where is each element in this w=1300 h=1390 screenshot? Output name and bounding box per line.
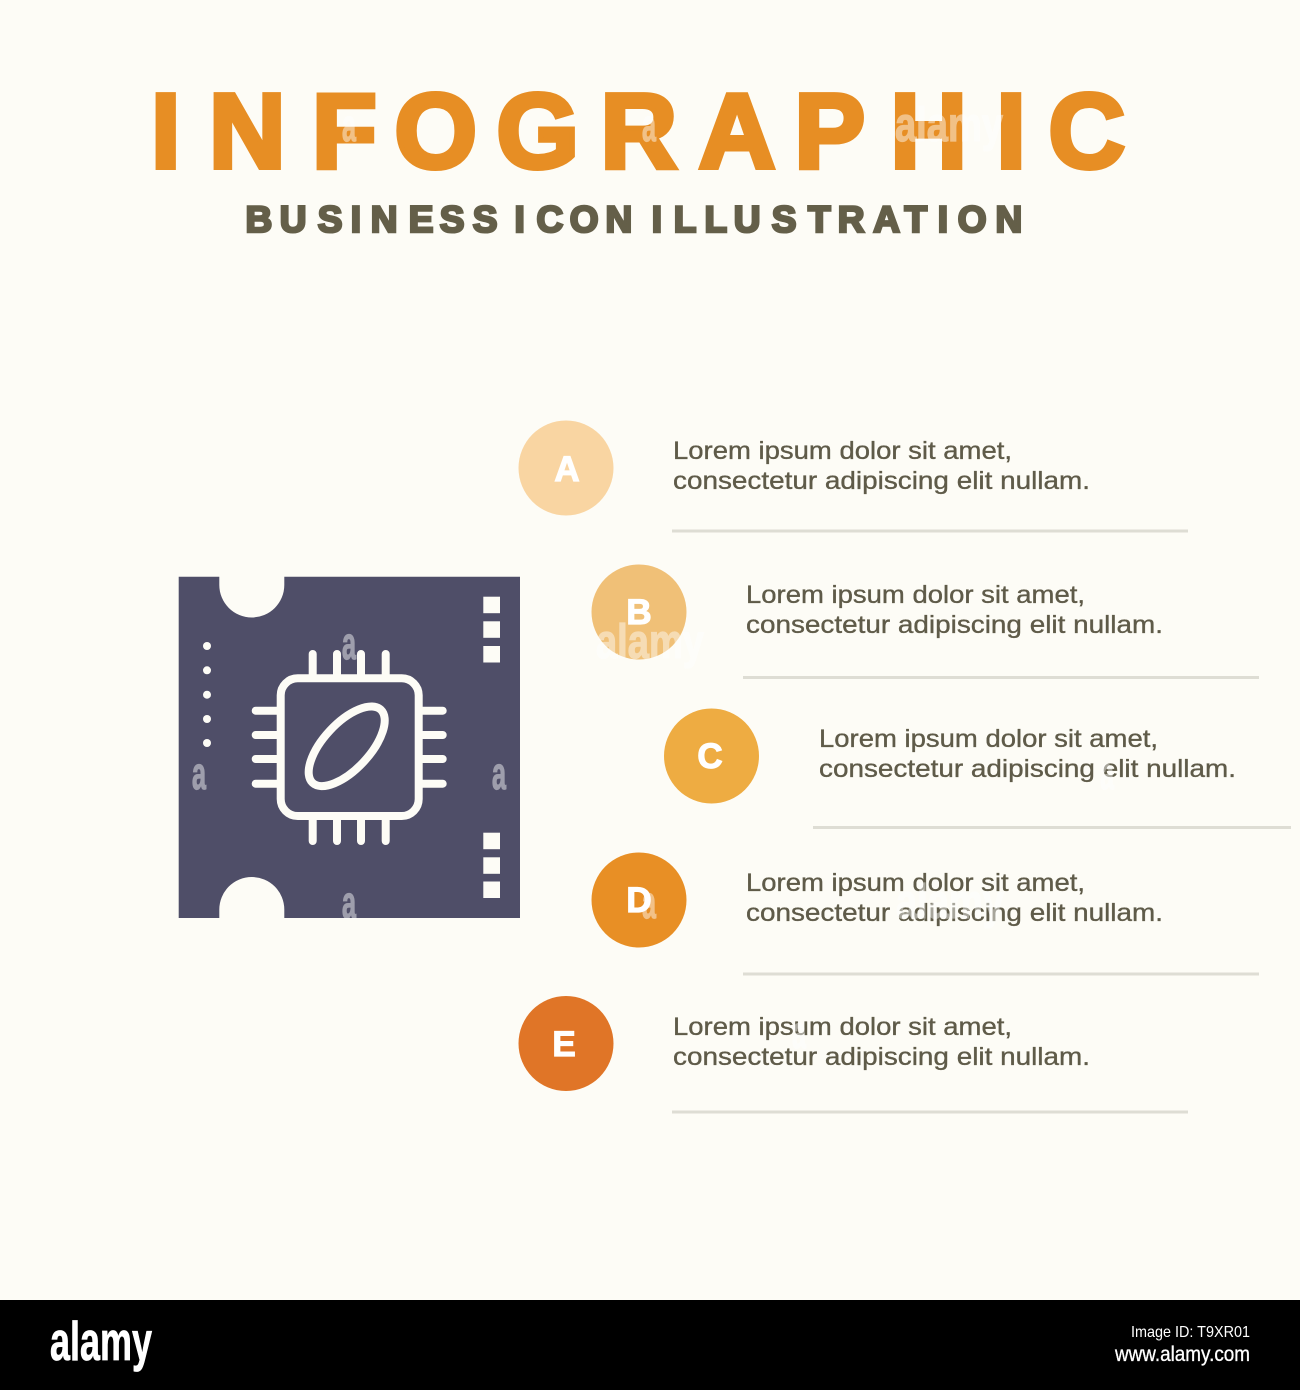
badge B — [592, 564, 686, 660]
watermarks: a — [342, 877, 357, 928]
watermarks: a — [342, 618, 357, 669]
step C — [664, 708, 1291, 829]
title: INFOGRAPHIC — [151, 72, 1125, 190]
chip body — [281, 678, 419, 816]
letter A: A — [554, 450, 580, 489]
board contact squares — [483, 597, 500, 898]
letter C: C — [697, 737, 723, 776]
step E — [518, 996, 1188, 1114]
watermarks: a — [1100, 748, 1115, 799]
badge D — [592, 852, 686, 948]
chip leaf ellipse — [296, 694, 398, 799]
watermarks: alamy — [596, 616, 704, 669]
divider A — [672, 530, 1188, 532]
letter E: E — [552, 1025, 576, 1064]
letter B: B — [626, 593, 652, 632]
divider B — [743, 676, 1259, 679]
watermarks: a — [642, 877, 657, 928]
circuit board with notches — [179, 577, 520, 918]
watermarks: alamy — [895, 99, 1003, 152]
watermarks — [192, 99, 1115, 1058]
website: www.alamy.com — [1114, 1343, 1250, 1366]
badge C — [664, 708, 759, 804]
step B — [592, 564, 1259, 679]
text C: consectetur adipiscing elit nullam. — [819, 755, 1236, 783]
divider D — [743, 972, 1259, 976]
text B: Lorem ipsum dolor sit amet, — [746, 581, 1085, 609]
divider C — [813, 826, 1291, 829]
divider E — [672, 1110, 1188, 1114]
letter D: D — [626, 881, 652, 920]
footer bar — [0, 1300, 1300, 1390]
text A: consectetur adipiscing elit nullam. — [673, 467, 1090, 495]
subtitle: BUSINESSICONILLUSTRATION — [246, 199, 1022, 240]
step A — [518, 420, 1188, 532]
step D — [592, 852, 1259, 976]
footer logo: alamy — [50, 1310, 152, 1372]
chip pins — [256, 654, 443, 841]
watermarks: a — [792, 1007, 807, 1058]
text D: Lorem ipsum dolor sit amet, — [746, 869, 1085, 897]
text E: Lorem ipsum dolor sit amet, — [673, 1013, 1012, 1041]
text D: consectetur adipiscing elit nullam. — [746, 899, 1163, 927]
text A: Lorem ipsum dolor sit amet, — [673, 437, 1012, 465]
watermarks: a — [642, 100, 657, 151]
icon: circuit board with processor chip — [179, 577, 520, 918]
text C: Lorem ipsum dolor sit amet, — [819, 725, 1158, 753]
board dots — [203, 642, 211, 747]
badge E — [518, 996, 614, 1091]
text E: consectetur adipiscing elit nullam. — [673, 1043, 1090, 1071]
watermarks: a — [192, 748, 207, 799]
badge A — [518, 420, 614, 516]
image id: Image ID: T9XR01 — [1131, 1324, 1250, 1341]
watermarks: a — [342, 100, 357, 151]
watermarks: a — [492, 748, 507, 799]
watermarks: alamy — [896, 876, 1004, 929]
text B: consectetur adipiscing elit nullam. — [746, 611, 1163, 639]
